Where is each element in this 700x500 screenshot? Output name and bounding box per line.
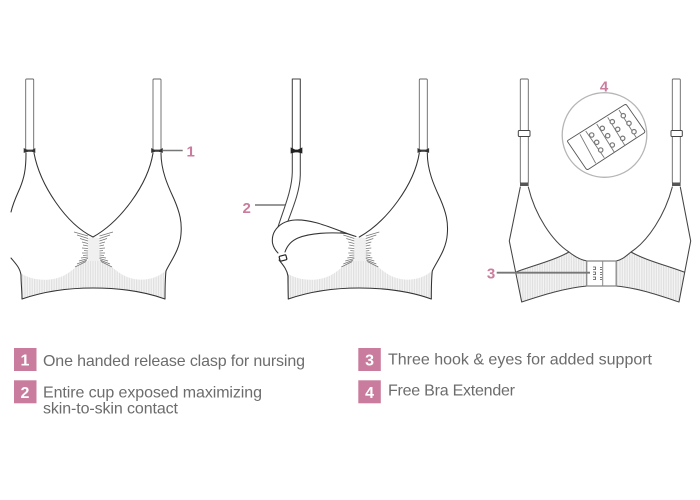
callout: label 1: 1 — [187, 144, 195, 160]
diagram: back view — [509, 79, 691, 302]
legend item 1: 1 — [21, 352, 30, 370]
callout: label 2 — [243, 200, 285, 217]
legend item 3: Three hook & eyes for added support — [388, 352, 653, 368]
diagram: front view with clasp closed — [11, 79, 181, 299]
legend item 3 — [358, 348, 653, 371]
bra extender — [568, 105, 645, 170]
legend item 4 — [358, 380, 516, 403]
callout: label 2: 2 — [243, 200, 251, 217]
diagram: front view with cup opened — [272, 79, 448, 299]
callout: label 4 with extender inset — [562, 78, 647, 177]
legend item 4: Free Bra Extender — [388, 382, 516, 400]
opened strap — [278, 79, 300, 227]
left cup outline — [11, 153, 93, 299]
left strap — [26, 79, 34, 150]
legend item 2: skin-to-skin contact — [43, 400, 179, 418]
inset circle — [562, 93, 647, 177]
straps — [518, 79, 682, 186]
right band — [616, 252, 684, 302]
legend item 2: Entire cup exposed maximizing — [43, 384, 262, 402]
callout: label 1 — [163, 144, 195, 160]
legend item 3: 3 — [365, 352, 374, 370]
strap clasp — [291, 148, 302, 153]
legend item 4: 4 — [365, 385, 374, 402]
left band — [517, 252, 587, 302]
back outline — [509, 187, 691, 302]
callout: label 3: 3 — [487, 266, 495, 282]
inner cup line — [285, 233, 347, 252]
left strap clasp — [24, 148, 35, 152]
cup flap — [272, 220, 356, 253]
callout: label 3 — [487, 266, 590, 282]
legend item 1 — [14, 348, 305, 371]
legend item 1: One handed release clasp for nursing — [43, 353, 305, 370]
nursing clasp — [279, 255, 287, 261]
legend item 2 — [14, 380, 262, 418]
left cup lower outline — [279, 260, 288, 299]
callout: label 4 with extender inset: 4 — [600, 78, 609, 96]
back fastener — [587, 261, 616, 286]
legend item 2: 2 — [21, 385, 30, 402]
